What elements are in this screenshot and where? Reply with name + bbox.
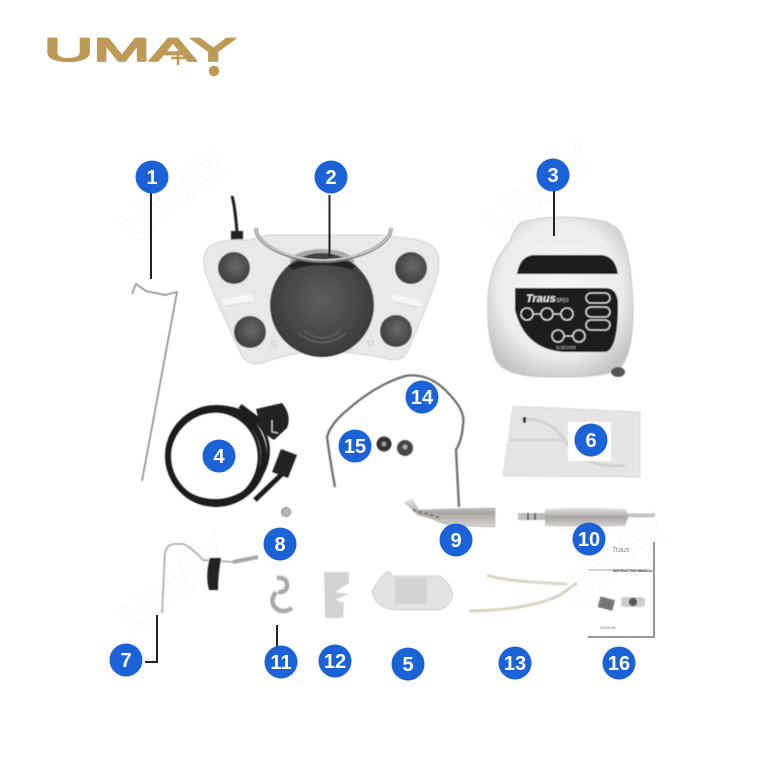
badge 2: [314, 160, 348, 194]
item 2: foot pedal: S: [270, 340, 277, 351]
badge 12: [318, 644, 352, 678]
badge 8: [264, 528, 296, 560]
badge 4: [202, 440, 236, 472]
item 8: small nut: [282, 508, 290, 516]
item 3: control unit: Traus: [526, 293, 556, 305]
badge 7: 7: [120, 650, 132, 672]
badge 5: 5: [402, 654, 414, 676]
item 13: tubing: [469, 575, 577, 611]
badge 3: [536, 158, 570, 192]
item 3: control unit: SAESHIN: [556, 345, 576, 350]
watermarks: UMAY: [476, 132, 605, 248]
item 16: instruction manual: [588, 542, 654, 637]
badge 15: 15: [344, 436, 366, 458]
badge 1: [136, 160, 168, 194]
side letters: P: [367, 339, 374, 351]
badge 10: 10: [578, 529, 600, 551]
watermarks: UMAY: [551, 502, 680, 618]
badge 2: 2: [325, 167, 337, 189]
item 15: rubber rings: [376, 436, 413, 456]
watermarks: UMAY: [111, 137, 240, 253]
badge 1: 1: [146, 167, 158, 189]
logo: UMAY: [44, 32, 236, 75]
badge 9: [440, 524, 472, 556]
item 16: instruction manual: Traus: [612, 547, 630, 554]
badge 6: [574, 424, 608, 456]
connector: [611, 367, 625, 377]
badge 8: 8: [274, 534, 286, 556]
item 7: clip cord: [162, 544, 258, 613]
housing: [488, 217, 633, 377]
grooves: [226, 298, 418, 303]
badge 9: 9: [450, 530, 462, 552]
item 3: control unit: SP10: [556, 298, 568, 304]
connector: [272, 449, 297, 478]
display: [517, 255, 618, 274]
badge 14: [406, 380, 438, 414]
item 1: bent rod: [132, 284, 177, 481]
badge 16: 16: [608, 653, 630, 675]
logo plus and dot: [171, 51, 218, 75]
watermarks: [111, 132, 680, 643]
badge 11: [264, 646, 298, 678]
badge 13: [498, 646, 532, 680]
buttons: [218, 252, 250, 284]
badge 13: 13: [504, 653, 526, 675]
logo: UMAY: UMAY: [44, 32, 236, 68]
badge 3: 3: [547, 165, 559, 187]
rail: [256, 228, 391, 261]
cord: [232, 196, 237, 232]
pedal body: [204, 235, 439, 364]
item 5: tray: [372, 571, 453, 610]
item 12: clip: [324, 572, 349, 618]
item 14: tube: [327, 375, 463, 507]
central disc: [290, 249, 354, 275]
badge 15: [338, 430, 372, 462]
item 10: micromotor: [518, 508, 655, 527]
item 6: bag: [503, 406, 640, 477]
item 4: power cable: [149, 387, 297, 523]
leader line: 2: [328, 195, 330, 257]
badge 7: [110, 644, 142, 676]
badge 12: 12: [324, 651, 346, 673]
panel controls: [521, 293, 610, 342]
badge 11: 11: [270, 652, 292, 674]
badge 10: [572, 522, 606, 556]
leader line: 7: [145, 615, 157, 662]
leader line: 1: [150, 190, 152, 279]
item 16: instruction manual: INSTRUCTION MANUAL: [613, 569, 654, 573]
badge 4: 4: [213, 446, 225, 468]
control panel: [515, 288, 618, 352]
item 3: control unit: [488, 217, 633, 377]
item 9: contra-angle handpiece: [405, 499, 495, 527]
watermarks: UMAY: [111, 527, 240, 643]
plug: [256, 403, 289, 440]
leader line: 3: [553, 188, 555, 236]
badge 6: 6: [585, 430, 597, 452]
item 2: foot pedal: [204, 196, 439, 364]
item 16: instruction manual: SAESHIN: [600, 626, 616, 630]
badge 5: [392, 648, 424, 680]
badge 16: [602, 646, 636, 680]
badge 14: 14: [411, 387, 434, 409]
item 11: hook: [272, 578, 292, 611]
leader line: 11: [276, 625, 278, 648]
